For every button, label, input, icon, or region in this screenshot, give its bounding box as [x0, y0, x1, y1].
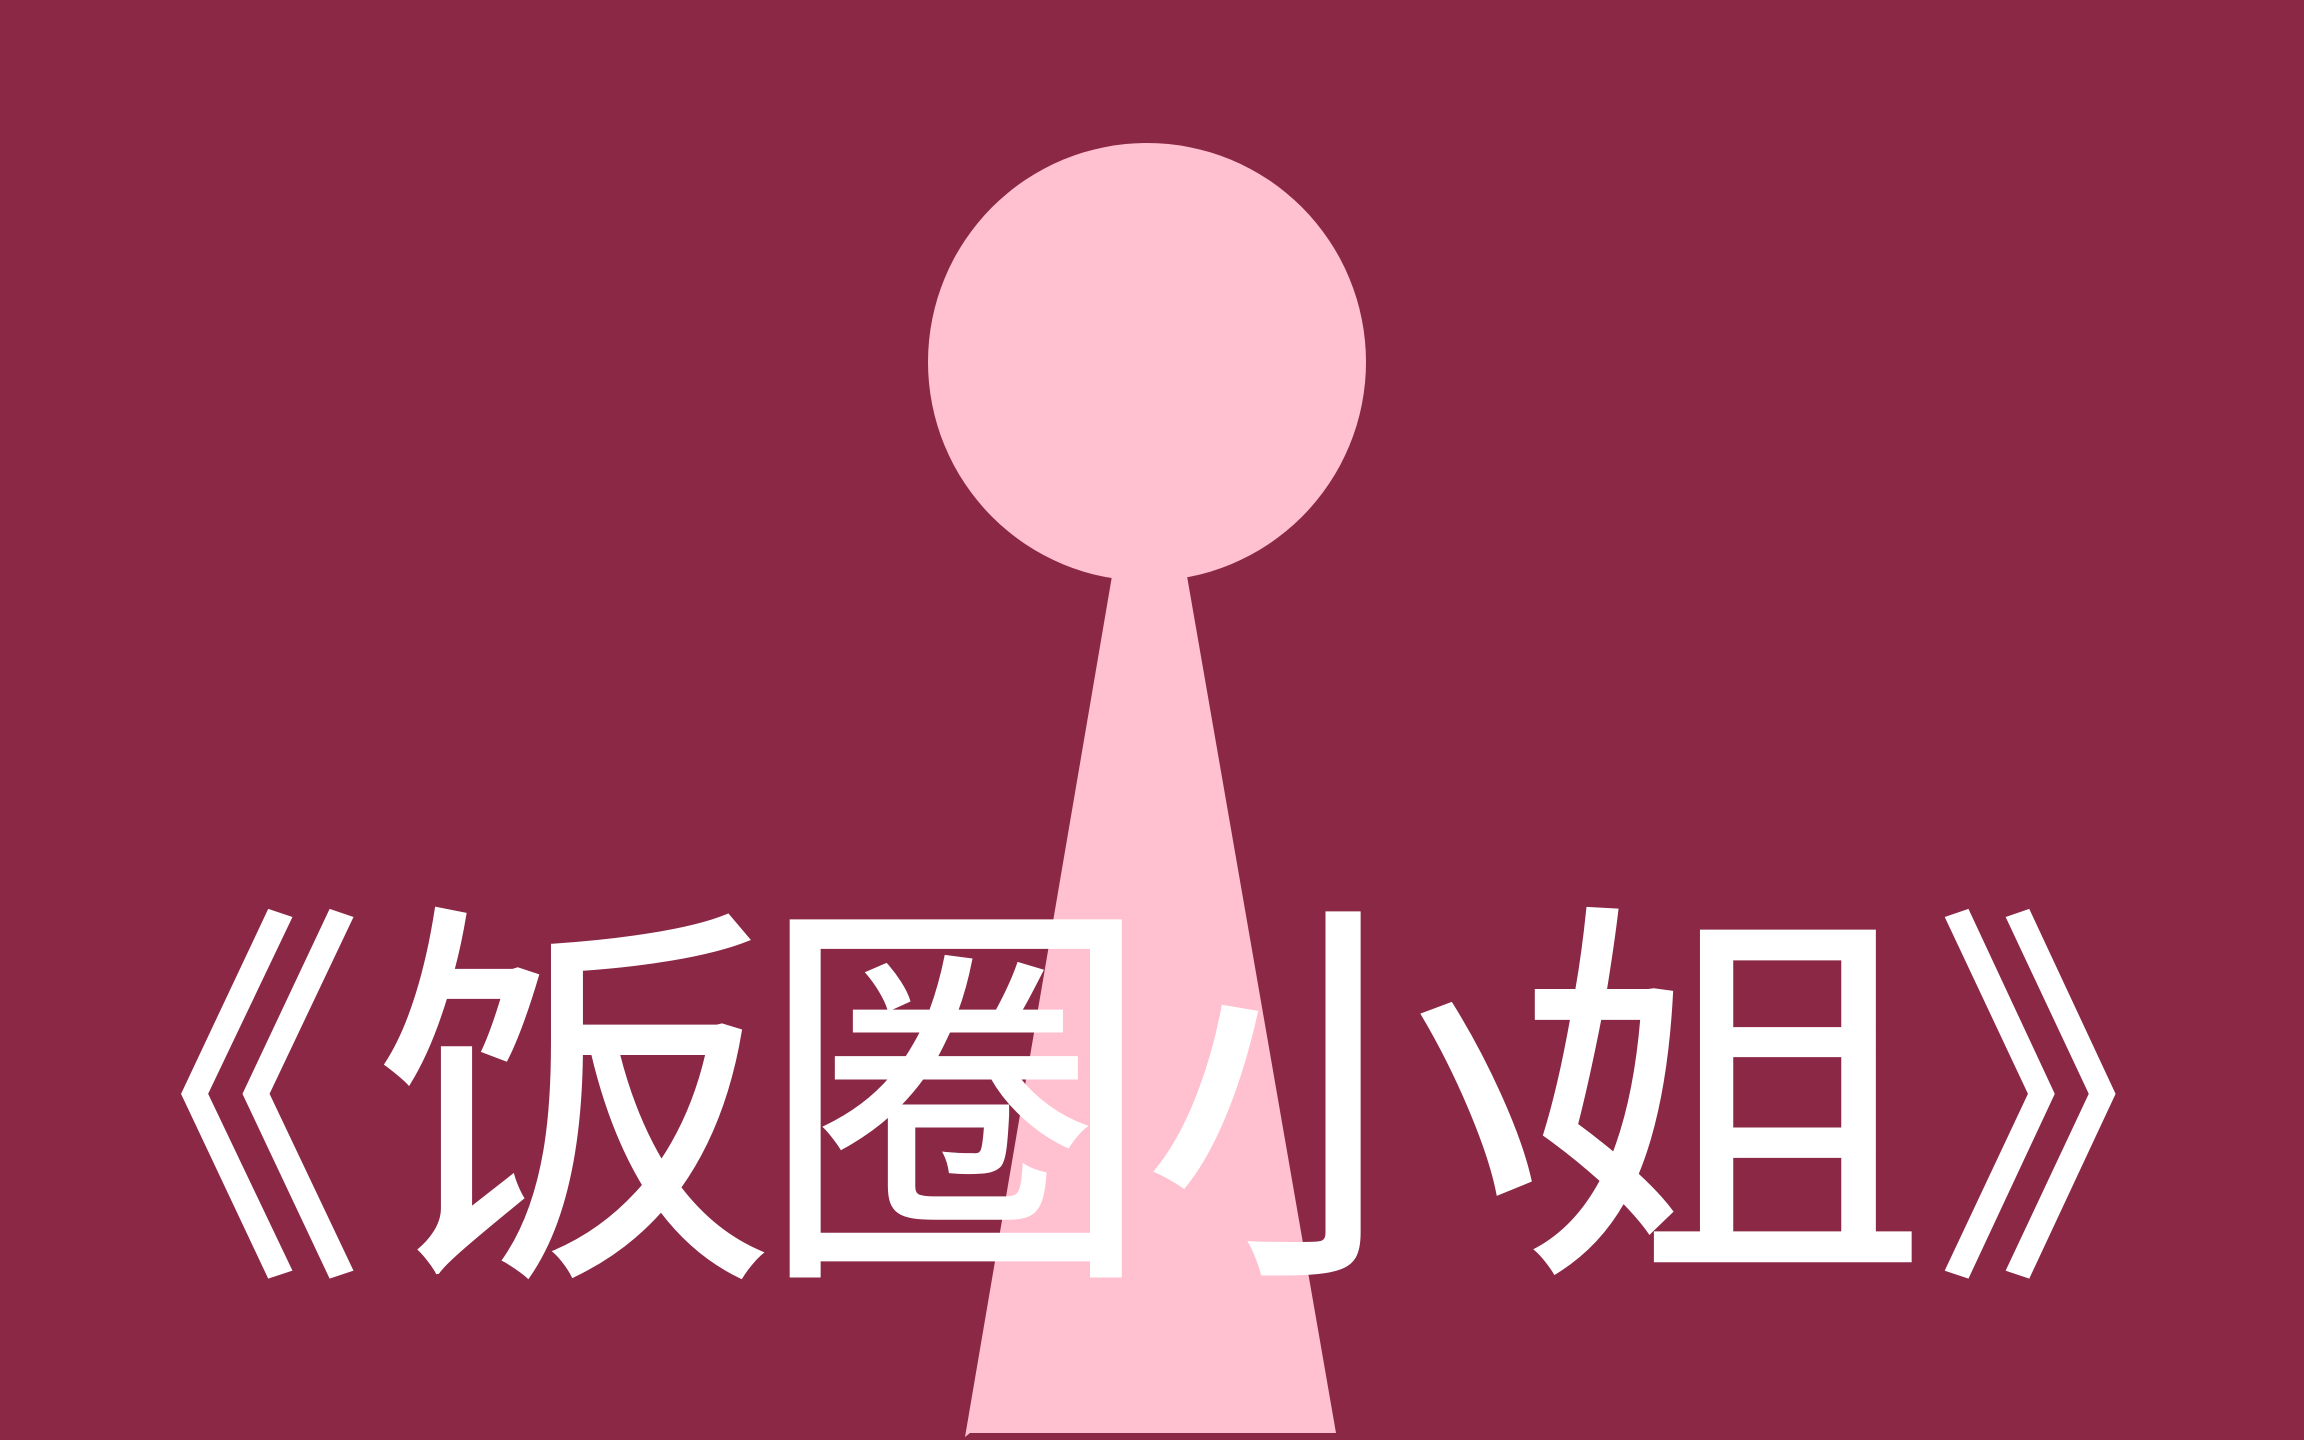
title: 饭: [376, 882, 776, 1329]
icon: pink pawn figure: [928, 143, 1366, 1437]
title: 姐: [1515, 883, 1927, 1326]
title: 小: [1143, 882, 1540, 1327]
title: 圈: [759, 879, 1152, 1330]
title: [0, 879, 2304, 1330]
